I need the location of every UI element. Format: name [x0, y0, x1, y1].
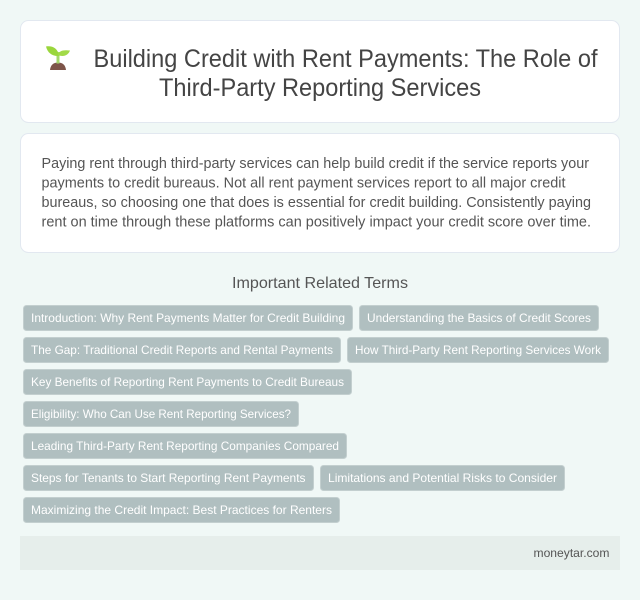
tag: eligibility: Eligibility: Who Can Use Rent Reporting Services? — [31, 407, 291, 421]
tag: limitations: Limitations and Potential Risks to Consider — [328, 471, 557, 485]
title: Third-Party Reporting Services — [159, 74, 481, 102]
text block: summary — [42, 156, 591, 230]
tag list — [24, 306, 608, 522]
text block: summary: rent on time through these platforms can positively impact your credit score over time. — [42, 214, 591, 230]
tag: introduction: Introduction: Why Rent Payments Matter for Credit Building — [31, 311, 345, 325]
tag: how services work: How Third-Party Rent Reporting Services Work — [355, 343, 602, 357]
tag: basics of credit scores — [360, 306, 598, 330]
panel: header — [20, 20, 620, 122]
heading: important related terms: Important Related Terms — [232, 275, 408, 292]
tag: limitations — [320, 466, 564, 490]
panel: summary paragraph — [20, 134, 620, 252]
tag: steps for tenants — [24, 466, 314, 490]
footer — [20, 536, 620, 570]
tag: leading companies — [24, 434, 346, 458]
tag: eligibility — [24, 402, 298, 426]
tag: leading companies: Leading Third-Party Rent Reporting Companies Compared — [31, 439, 339, 453]
tag: key benefits: Key Benefits of Reporting Rent Payments to Credit Bureaus — [31, 375, 344, 389]
text block: summary: Paying rent through third-party services can help build credit if the service reports your — [42, 156, 589, 172]
tag: key benefits — [24, 370, 352, 394]
text block: summary: payments to credit bureaus. Not all rent payment services report to all major credit — [42, 176, 566, 192]
tag: the gap: The Gap: Traditional Credit Reports and Rental Payments — [31, 343, 333, 357]
footer: moneytar.com — [534, 546, 610, 560]
tag: how services work — [348, 338, 608, 362]
title — [94, 45, 598, 102]
tag: maximizing impact — [24, 498, 340, 522]
tag: introduction — [24, 306, 352, 330]
tag: steps for tenants: Steps for Tenants to Start Reporting Rent Payments — [31, 471, 306, 485]
text block: summary: bureaus, so choosing one that does is essential for credit building. Consistently paying — [42, 195, 591, 211]
tag: maximizing impact: Maximizing the Credit Impact: Best Practices for Renters — [31, 503, 332, 517]
tag: the gap — [24, 338, 340, 362]
icon: seedling — [46, 46, 70, 70]
title: Building Credit with Rent Payments: The Role of — [94, 45, 598, 73]
tag: basics of credit scores: Understanding the Basics of Credit Scores — [367, 311, 591, 325]
